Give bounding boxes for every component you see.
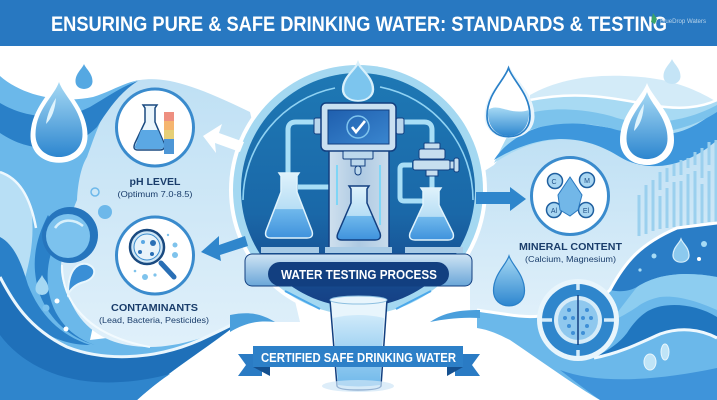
white stripe [530, 95, 717, 108]
pipes [288, 122, 432, 201]
dark blue band [494, 110, 717, 166]
mid blue band [510, 105, 717, 138]
ribbon label: CERTIFIED SAFE DRINKING WATER [261, 351, 456, 365]
white crest line [477, 223, 717, 317]
swoosh from centre [430, 310, 480, 322]
icon: magnifier [130, 230, 174, 277]
light band under mineral section and lower wave [477, 225, 717, 400]
central circle [229, 61, 487, 319]
pipe connectors [314, 118, 322, 134]
bottom lighter wave [0, 335, 170, 400]
icon: crystal [558, 177, 582, 216]
pH heading: pH LEVEL [130, 176, 181, 188]
nozzle [343, 151, 373, 175]
display housing [321, 103, 396, 151]
icon: bubble [42, 188, 112, 263]
contaminants detail: (Lead, Bacteria, Pesticides) [99, 315, 209, 325]
icon: large right drop [620, 83, 674, 165]
pH detail: (Optimum 7.0-8.5) [118, 189, 193, 199]
element labels [551, 178, 590, 215]
arrow: to pH [203, 124, 244, 153]
wave droplets [644, 344, 669, 370]
right flask [410, 188, 453, 240]
dark top band [0, 81, 138, 148]
middle flask [337, 186, 380, 240]
contaminants heading: CONTAMINANTS [111, 302, 198, 314]
machine column [329, 150, 389, 250]
pale panel edge line [62, 265, 150, 347]
element labels: C [551, 179, 557, 186]
shelves [261, 247, 463, 253]
logo [651, 13, 707, 25]
pale panel behind left labels [61, 79, 300, 347]
arrow: to contaminants [201, 236, 248, 261]
light middle wave [610, 274, 717, 322]
testing machine [245, 63, 472, 286]
white swirl line [0, 172, 36, 228]
header bar [0, 0, 717, 46]
top pale wave [530, 76, 717, 125]
check mark [347, 116, 369, 138]
icon: element bubbles [546, 172, 594, 218]
deep middle wave [594, 305, 717, 357]
valve [413, 143, 459, 176]
mineral heading: MINERAL CONTENT [519, 241, 623, 253]
icon: lower drop [494, 256, 524, 306]
icon: filter disc [537, 279, 619, 361]
panel: contaminants [99, 217, 209, 325]
contaminants icon circle [116, 217, 194, 294]
mineral detail: (Calcium, Magnesium) [525, 254, 616, 264]
lower deep wave [0, 277, 245, 400]
icon: splash drop [36, 264, 94, 332]
screen [328, 110, 389, 144]
panel: pH level [116, 89, 194, 199]
mineral icon circle [532, 158, 608, 234]
white swoosh line [0, 277, 245, 357]
process label [268, 262, 449, 286]
pale left swirl [0, 172, 33, 278]
pH icon circle [116, 89, 194, 166]
process label: WATER TESTING PROCESS [281, 267, 437, 282]
pale panel behind mineral label [470, 135, 717, 320]
light blue wave [494, 95, 717, 166]
top water drop [343, 63, 373, 101]
element labels: Al [551, 208, 558, 215]
element labels: El [583, 208, 590, 215]
left wave background [0, 76, 300, 400]
icon: large left drop [30, 75, 88, 163]
ribbon banner [238, 346, 480, 376]
dark swirl band [0, 237, 90, 345]
glass of water [322, 296, 394, 392]
left flask [266, 173, 312, 238]
base light wave [0, 76, 240, 400]
icon: small left drop [76, 64, 92, 89]
dark leg from bubble ring [35, 215, 95, 345]
flask water [135, 130, 164, 149]
panel: mineral content [519, 158, 623, 264]
element labels: M [584, 178, 590, 185]
icon: flask [134, 105, 164, 150]
contaminant dots [134, 234, 178, 280]
lower wave darker base [560, 368, 717, 400]
platform [245, 254, 472, 286]
icon: half-filled drop [484, 66, 534, 138]
upper dark wave [610, 223, 717, 291]
icon: pale small right drop [664, 59, 680, 84]
swoosh to centre [230, 313, 275, 332]
white stripe on lower wave [594, 330, 717, 358]
vertical data stripes [639, 140, 716, 236]
logo: BlueDrop Waters [660, 18, 707, 25]
wave drop [673, 239, 689, 262]
icon: pH strip [164, 112, 174, 154]
arrow: to mineral [476, 187, 526, 211]
right wave background [430, 76, 717, 400]
